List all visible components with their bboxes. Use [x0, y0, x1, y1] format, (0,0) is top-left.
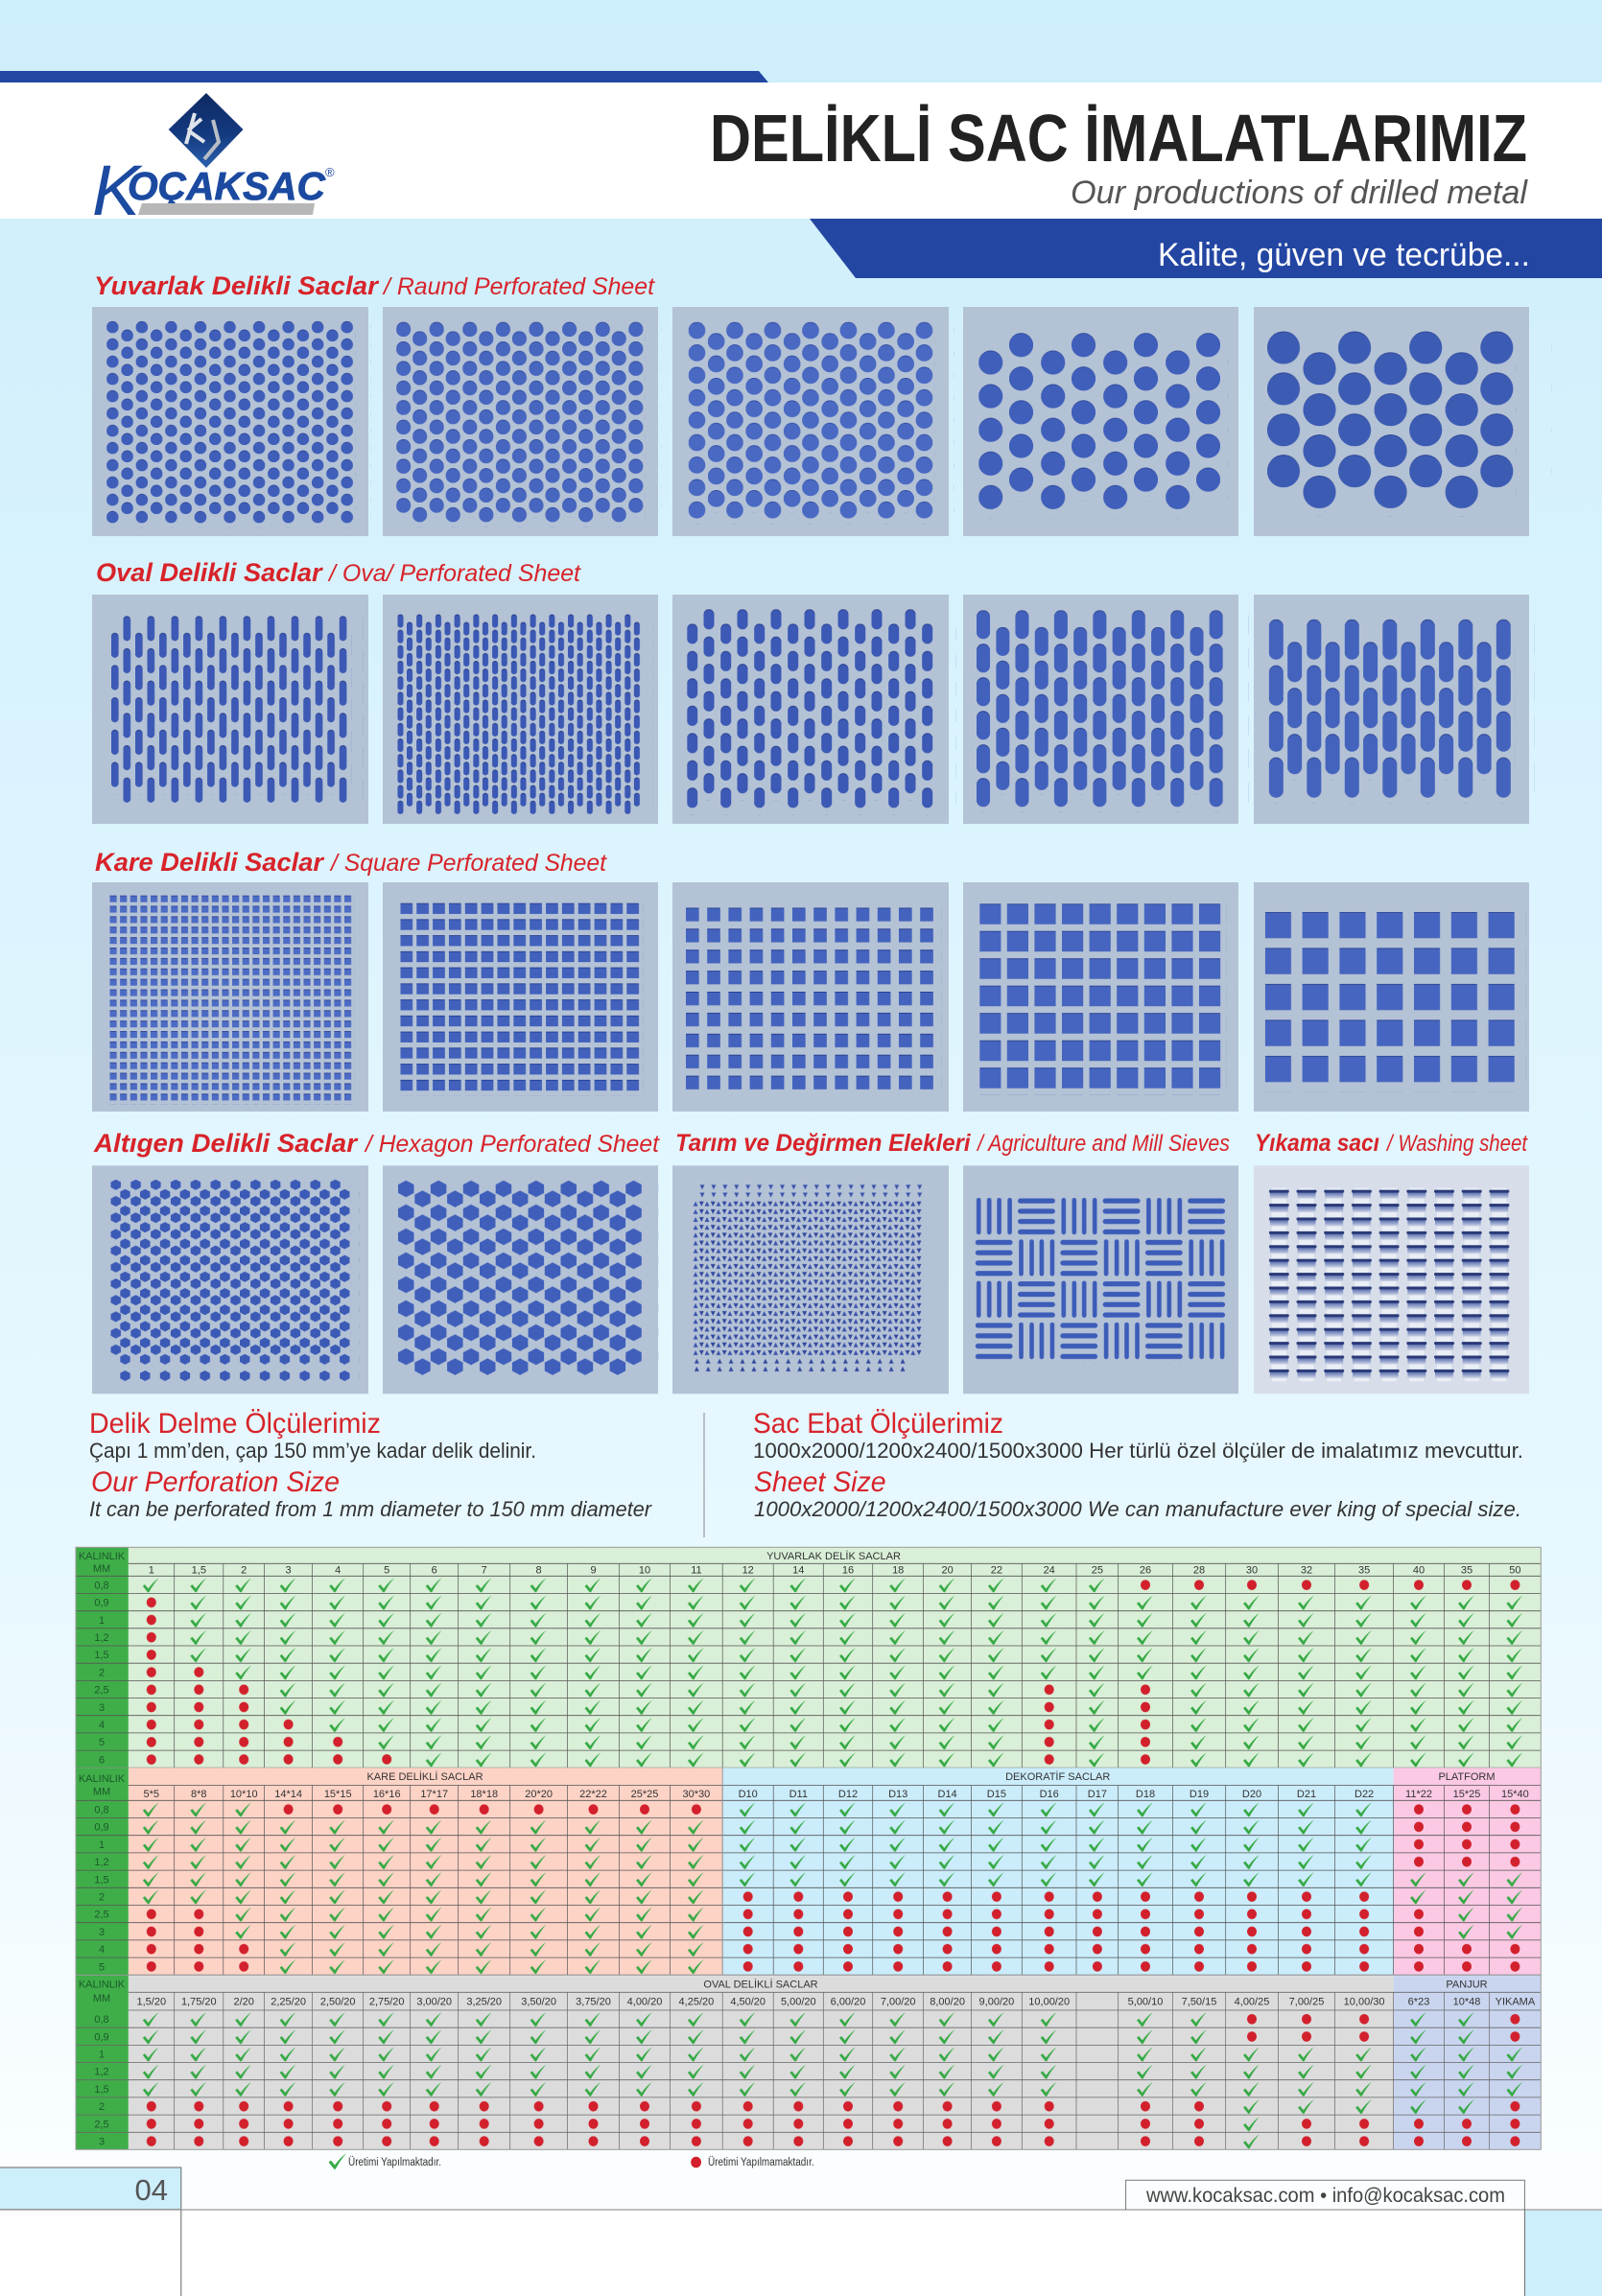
icon: check mark	[329, 2153, 346, 2169]
column headers: 5,00/20	[781, 1997, 816, 2008]
column headers: D19	[1190, 1789, 1209, 1800]
panel: square holes 1	[92, 882, 368, 1112]
thickness header: MM	[93, 1563, 110, 1575]
page number box	[0, 2167, 181, 2210]
panel: round holes 3	[672, 307, 954, 536]
heading: round perforated sheet: Yuvarlak Delikli Saclar	[94, 271, 380, 300]
column headers: 24	[1044, 1565, 1055, 1577]
row labels	[94, 1805, 109, 1973]
tagline text: Kalite, güven ve tecrübe...	[1158, 237, 1530, 273]
row labels: 2,5	[94, 2119, 109, 2130]
column headers: 35	[1358, 1565, 1370, 1577]
row labels: 2,5	[94, 1685, 109, 1697]
row labels: 1,5	[94, 1874, 109, 1886]
row labels: 1	[99, 1839, 105, 1851]
logo wordmark: OÇAKSAC	[128, 164, 326, 208]
row labels: 0,9	[94, 1598, 109, 1609]
column headers: 1,75/20	[181, 1997, 217, 2008]
thickness header	[79, 1980, 126, 2004]
column headers: 28	[1193, 1565, 1205, 1577]
column headers: 5	[384, 1565, 389, 1577]
table title: YUVARLAK DELİK SACLAR	[766, 1550, 901, 1562]
column headers: 10,00/30	[1344, 1997, 1385, 2008]
row labels: 1,2	[94, 1632, 109, 1644]
column headers: 12	[742, 1565, 754, 1577]
table: oval holes and shutters	[76, 1975, 1541, 2150]
row labels: 0,8	[94, 1805, 109, 1816]
row labels	[94, 1581, 109, 1766]
row labels: 0,8	[94, 1581, 109, 1592]
row labels: 3	[99, 1702, 105, 1714]
text block: sheet sizes: Sac Ebat Ölçülerimiz	[753, 1408, 1003, 1440]
thickness header: MM	[93, 1787, 110, 1798]
column headers: 1	[149, 1565, 154, 1577]
heading: agriculture and mill sieves: / Agriculture and Mill Sieves	[976, 1131, 1230, 1157]
panel: round holes 2	[383, 307, 662, 536]
heading: washing sheet: / Washing sheet	[1385, 1131, 1528, 1157]
column headers: 10	[639, 1565, 650, 1577]
panel: basket weave slots	[963, 1165, 1238, 1394]
column headers: 22*22	[579, 1789, 607, 1800]
table: square, decorative and platform	[76, 1768, 1541, 1975]
column headers: 4,50/20	[730, 1997, 766, 2008]
column headers: 10*10	[230, 1789, 258, 1800]
icon: red dot	[691, 2157, 701, 2167]
column headers: 16*16	[373, 1789, 401, 1800]
column headers: D14	[938, 1789, 957, 1800]
column headers: 2,50/20	[320, 1997, 356, 2008]
legend: Üretimi Yapılmamaktadır.	[708, 2157, 814, 2168]
column headers: 40	[1413, 1565, 1425, 1577]
thickness header: KALINLIK	[79, 1980, 126, 1991]
column headers: 15*15	[324, 1789, 352, 1800]
thickness header	[79, 1551, 126, 1575]
column headers	[144, 1789, 1529, 1800]
column headers: D17	[1088, 1789, 1107, 1800]
text block: perforation sizes	[89, 1408, 653, 1521]
column headers: 9	[590, 1565, 597, 1577]
heading: oval perforated sheet: Oval Delikli Saclar	[96, 558, 323, 587]
column headers: 8,00/20	[930, 1997, 965, 2008]
logo wordmark	[92, 151, 335, 230]
section titles: DEKORATİF SACLAR	[1005, 1770, 1110, 1783]
column headers: 6	[432, 1565, 437, 1577]
row labels: 5	[99, 1961, 105, 1973]
logo wordmark: K	[92, 151, 144, 230]
text block: perforation sizes: It can be perforated from 1 mm diameter to 150 mm diameter	[89, 1497, 653, 1521]
heading: square perforated sheet: Kare Delikli Saclar	[95, 848, 324, 877]
column headers: 8	[536, 1565, 542, 1577]
row labels: 3	[99, 2137, 105, 2148]
column headers: 15*40	[1501, 1789, 1529, 1800]
column headers: D22	[1355, 1789, 1374, 1800]
column headers: 6,00/20	[831, 1997, 865, 2008]
column headers: 2,25/20	[271, 1997, 306, 2008]
logo wordmark: ®	[325, 165, 335, 179]
heading: washing sheet: Yıkama sacı	[1255, 1130, 1379, 1157]
column headers: D11	[789, 1789, 808, 1800]
column headers: 16	[842, 1565, 854, 1577]
heading: oval perforated sheet	[96, 558, 581, 587]
column headers: 7,00/20	[881, 1997, 916, 2008]
row labels: 1,5	[94, 2084, 109, 2096]
contact box: www.kocaksac.com • info@kocaksac.com	[1145, 2185, 1505, 2207]
column headers: 17*17	[420, 1789, 448, 1800]
column headers: 25	[1092, 1565, 1103, 1577]
column headers: 7	[482, 1565, 487, 1577]
row labels: 2	[99, 1667, 105, 1678]
row labels: 1,2	[94, 2067, 109, 2078]
heading: hexagon perforated sheet: Altıgen Delikli Saclar	[93, 1129, 359, 1158]
column headers: 26	[1140, 1565, 1151, 1577]
row labels	[94, 2014, 109, 2148]
heading: square perforated sheet	[95, 848, 607, 877]
heading: washing sheet	[1255, 1130, 1528, 1157]
column headers: 8*8	[191, 1789, 207, 1800]
column headers: 4,00/25	[1235, 1997, 1269, 2008]
red dots	[137, 1800, 1529, 1975]
panel: square holes 4	[963, 882, 1238, 1112]
row labels: 1	[99, 1615, 105, 1627]
heading: oval perforated sheet: / Ova/ Perforated Sheet	[327, 560, 581, 587]
column headers: 2/20	[233, 1997, 254, 2008]
legend	[329, 2153, 814, 2169]
heading: hexagon perforated sheet: / Hexagon Perforated Sheet	[364, 1131, 660, 1158]
row labels: 1	[99, 2050, 105, 2061]
panel: hexagon holes 1	[92, 1165, 368, 1394]
table: round holes	[76, 1547, 1541, 1768]
column headers: 35	[1461, 1565, 1472, 1577]
section titles: OVAL DELİKLİ SACLAR	[703, 1979, 818, 1991]
footer corner block	[1524, 2210, 1602, 2296]
section titles: PANJUR	[1446, 1980, 1488, 1991]
column headers: 4,25/20	[679, 1997, 714, 2008]
red dots	[137, 2010, 1529, 2150]
check marks	[137, 1800, 1529, 1975]
column headers: 25*25	[631, 1789, 658, 1800]
text block: perforation sizes: Our Perforation Size	[91, 1466, 340, 1498]
heading: agriculture and mill sieves: Tarım ve Değirmen Elekleri	[675, 1130, 972, 1157]
column headers: 14*14	[274, 1789, 302, 1800]
panel: square holes 3	[672, 882, 949, 1112]
row labels: 6	[99, 1754, 105, 1766]
column headers: 50	[1509, 1565, 1521, 1577]
header blue strip	[0, 71, 768, 82]
column headers: 32	[1301, 1565, 1312, 1577]
row labels: 5	[99, 1737, 105, 1748]
panel: square holes 5	[1254, 882, 1529, 1112]
section titles: PLATFORM	[1438, 1771, 1496, 1783]
icon: logo diamond	[169, 93, 244, 168]
column headers: 3,50/20	[521, 1997, 556, 2008]
column headers: D18	[1136, 1789, 1155, 1800]
column headers: D12	[838, 1789, 858, 1800]
column headers	[149, 1565, 1521, 1577]
panel: oval holes 5	[1254, 595, 1534, 824]
column headers: D16	[1040, 1789, 1059, 1800]
section titles	[366, 1770, 1496, 1783]
row labels: 4	[99, 1720, 105, 1731]
tagline blue band	[810, 219, 1602, 278]
panel: oval holes 3	[672, 595, 955, 824]
thickness header: KALINLIK	[79, 1551, 126, 1562]
red dots	[137, 1576, 1529, 1768]
column headers: 3,75/20	[576, 1997, 611, 2008]
row labels: 3	[99, 1927, 105, 1938]
column headers: 20*20	[525, 1789, 553, 1800]
column headers: 14	[792, 1565, 804, 1577]
column headers	[137, 1997, 1536, 2008]
section titles: KARE DELİKLİ SACLAR	[366, 1770, 483, 1783]
row labels: 0,9	[94, 1822, 109, 1834]
text block: sheet sizes: Sheet Size	[754, 1466, 886, 1498]
subtitle: Our productions of drilled metal	[1071, 175, 1528, 211]
column headers: D20	[1242, 1789, 1261, 1800]
column headers: 30*30	[683, 1789, 710, 1800]
row labels: 2	[99, 1891, 105, 1903]
logo: Koçaksac	[92, 93, 335, 230]
column headers: 4,00/20	[627, 1997, 662, 2008]
column headers: 18*18	[470, 1789, 498, 1800]
page number box: 04	[135, 2173, 168, 2207]
column headers: YIKAMA	[1496, 1997, 1536, 2008]
column headers: 11	[691, 1565, 702, 1577]
column headers: 2	[241, 1565, 247, 1577]
column headers: 1,5	[192, 1565, 206, 1577]
column headers: 4	[335, 1565, 341, 1577]
panel: oval holes 4	[963, 595, 1248, 824]
thickness header	[79, 1773, 126, 1798]
legend: Üretimi Yapılmaktadır.	[348, 2157, 441, 2168]
panel: oval holes 2	[383, 595, 658, 824]
column headers: 9,00/20	[979, 1997, 1014, 2008]
column headers: 6*23	[1408, 1997, 1429, 2008]
check marks	[137, 1576, 1529, 1768]
column headers: 15*25	[1453, 1789, 1480, 1800]
panel: square holes 2	[383, 882, 658, 1112]
text block: sheet sizes: 1000x2000/1200x2400/1500x3000 We can manufacture ever king of special size.	[754, 1497, 1521, 1521]
column headers: 22	[991, 1565, 1002, 1577]
text block: sheet sizes: 1000x2000/1200x2400/1500x3000 Her türlü özel ölçüler de imalatımız mevcuttur.	[753, 1439, 1523, 1463]
section titles	[703, 1979, 1488, 1991]
column headers: D13	[888, 1789, 907, 1800]
column headers: 3,25/20	[466, 1997, 502, 2008]
column headers: 7,00/25	[1289, 1997, 1324, 2008]
heading: hexagon perforated sheet	[93, 1129, 660, 1158]
column headers: 10*48	[1453, 1997, 1480, 2008]
column headers: 30	[1246, 1565, 1258, 1577]
thickness header: MM	[93, 1993, 110, 2004]
panel: round holes 1	[92, 307, 370, 536]
row labels: 2	[99, 2101, 105, 2113]
column headers: 5,00/10	[1128, 1997, 1163, 2008]
row labels: 0,9	[94, 2031, 109, 2043]
column headers: 1,5/20	[137, 1997, 166, 2008]
heading: square perforated sheet: / Square Perforated Sheet	[329, 850, 607, 877]
panel: hexagon holes 2	[383, 1165, 658, 1394]
row labels: 1,2	[94, 1857, 109, 1868]
column headers: D21	[1297, 1789, 1316, 1800]
check marks	[137, 2010, 1529, 2150]
row labels: 4	[99, 1944, 105, 1956]
column headers: 2,75/20	[369, 1997, 405, 2008]
panel: round holes 4	[963, 307, 1259, 536]
panel: oval holes 1	[92, 595, 368, 824]
column headers: D15	[987, 1789, 1006, 1800]
row labels: 1,5	[94, 1650, 109, 1661]
column headers: 3	[286, 1565, 292, 1577]
column headers: 18	[892, 1565, 904, 1577]
column headers: 10,00/20	[1028, 1997, 1070, 2008]
column headers: 11*22	[1405, 1789, 1432, 1800]
row labels: 0,8	[94, 2014, 109, 2026]
column headers: D10	[739, 1789, 758, 1800]
column headers: 7,50/15	[1182, 1997, 1216, 2008]
column headers: 3,00/20	[416, 1997, 452, 2008]
panel: round holes 5	[1254, 307, 1551, 536]
footer background	[0, 2210, 1602, 2296]
text block: perforation sizes: Çapı 1 mm’den, çap 150 mm’ye kadar delik delinir.	[89, 1439, 536, 1463]
thickness header: KALINLIK	[79, 1773, 126, 1785]
row labels: 2,5	[94, 1909, 109, 1921]
heading: round perforated sheet	[94, 271, 655, 300]
panel: washing sheet	[1254, 1165, 1529, 1394]
column headers: 5*5	[144, 1789, 159, 1800]
column headers: 20	[941, 1565, 954, 1577]
heading: agriculture and mill sieves	[675, 1130, 1230, 1157]
heading: round perforated sheet: / Raund Perforated Sheet	[382, 273, 655, 300]
panel: triangle sieve	[672, 1165, 949, 1394]
text block: perforation sizes: Delik Delme Ölçülerimiz	[89, 1408, 381, 1440]
text block: sheet sizes	[753, 1408, 1523, 1521]
header white band	[0, 82, 1602, 219]
